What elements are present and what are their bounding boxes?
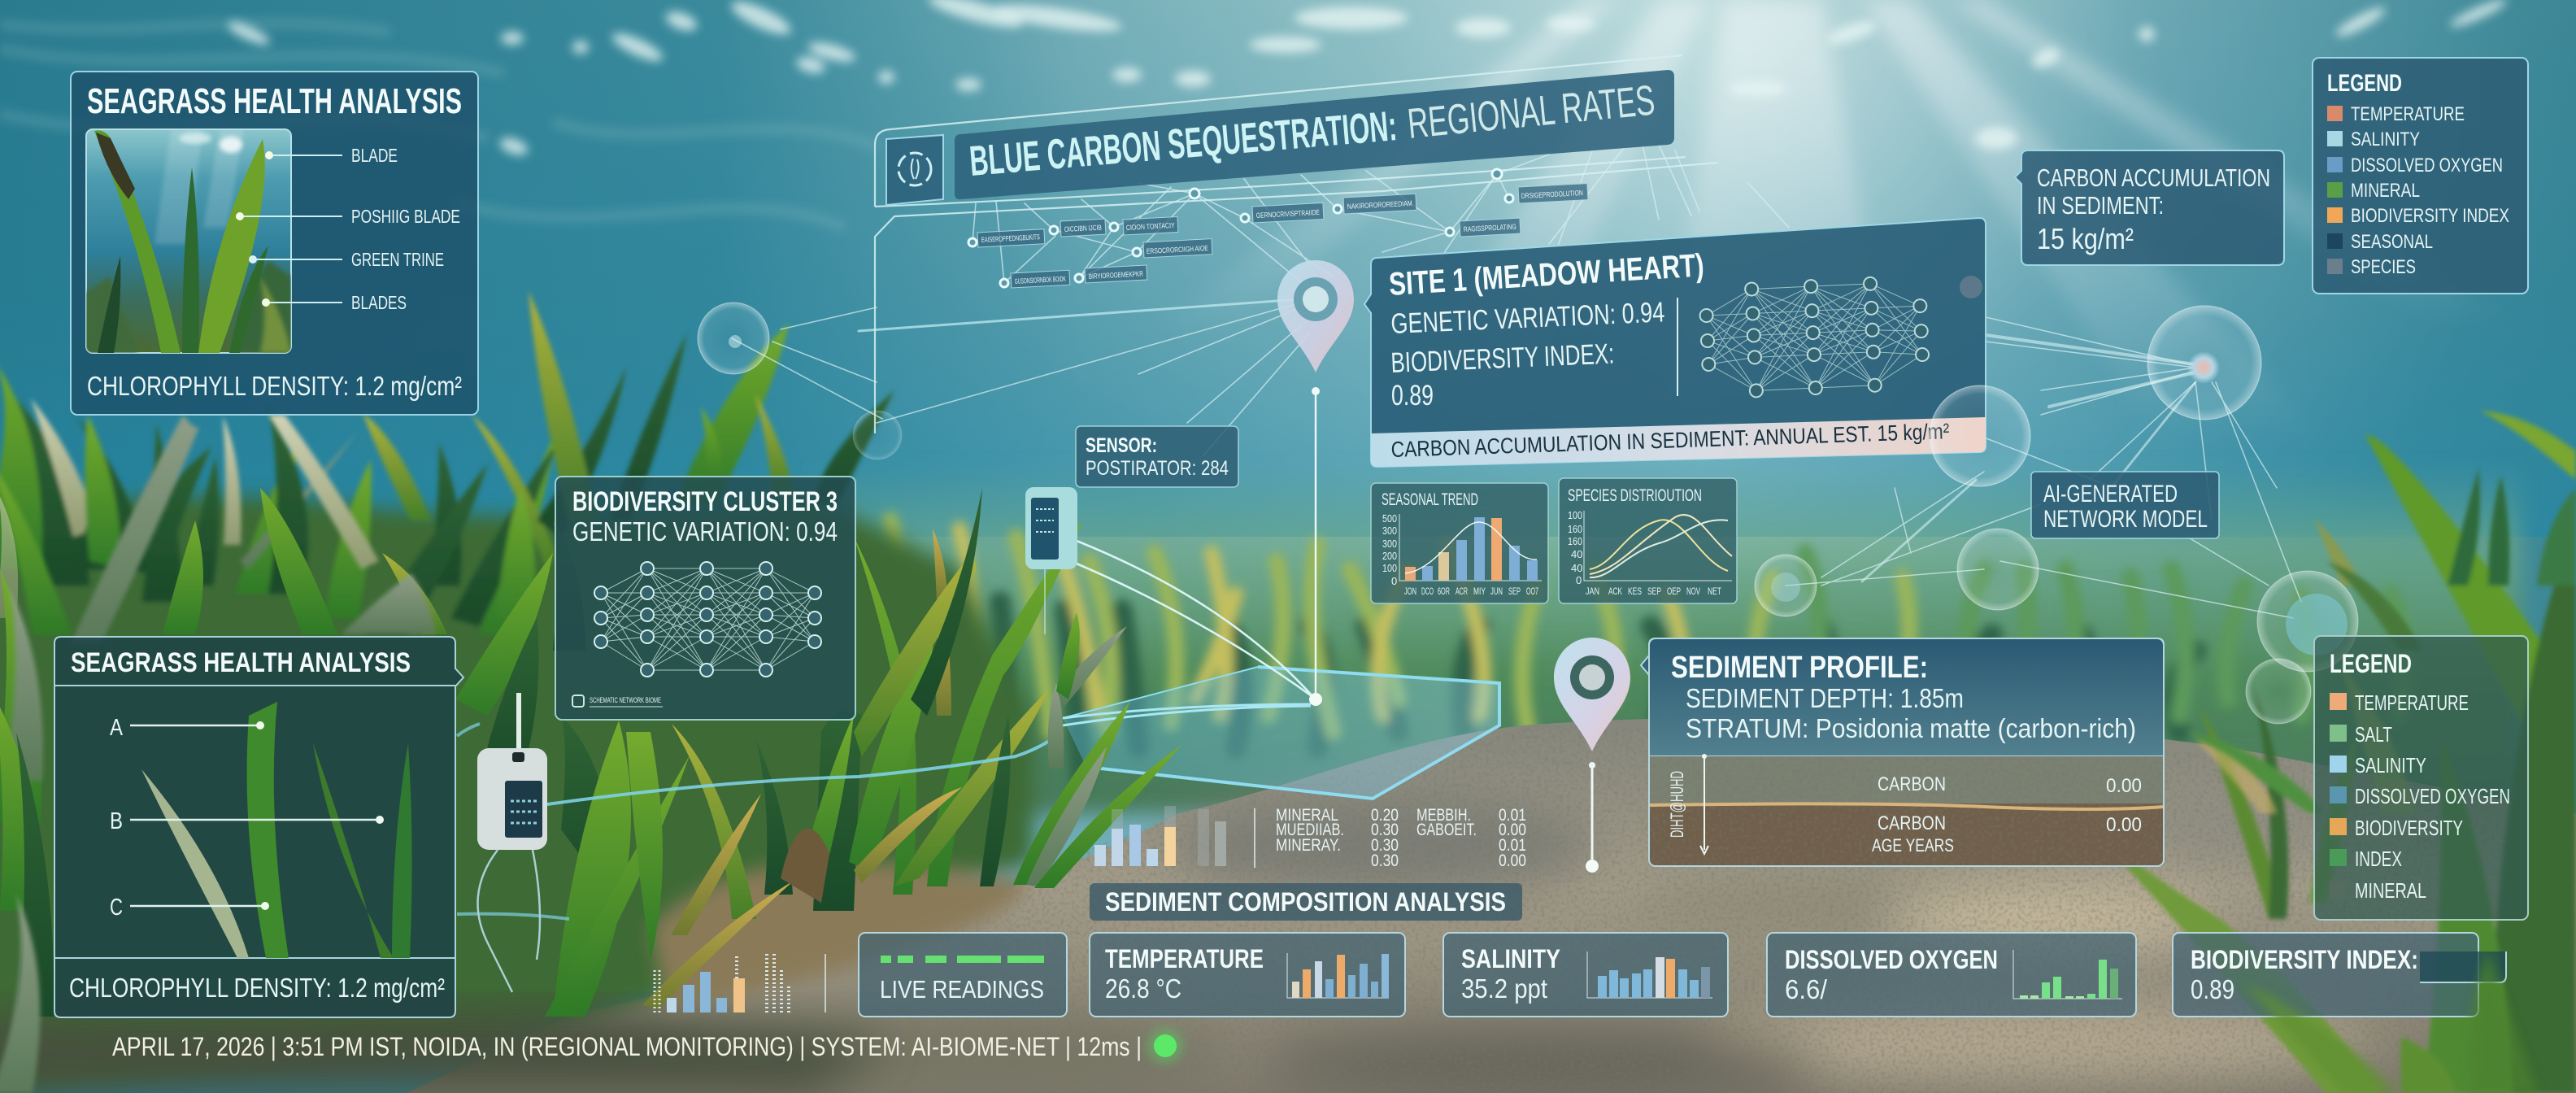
metric: genetic variation: GENETIC VARIATION: 0.94: [1390, 296, 1665, 340]
network of small data labels: ERSOCRORCIIGH AIOE: [1147, 244, 1208, 255]
line chart: species distribution: 160: [1568, 523, 1582, 535]
callout: sensor reading: SENSOR:: [1086, 434, 1157, 457]
table: sediment composition values: 0.30: [1371, 821, 1399, 839]
heading: sediment profile: SEDIMENT PROFILE:: [1671, 651, 1928, 685]
table: sediment composition values: 0.20: [1371, 806, 1399, 825]
callout: AI-generated network model: NETWORK MODEL: [2043, 506, 2208, 533]
legend: upper right: [2313, 58, 2528, 294]
legend: lower right: LEGEND: [2330, 649, 2412, 678]
callout: AI-generated network model: AI-GENERATED: [2043, 481, 2178, 507]
heading: biodiversity index: BIODIVERSITY INDEX:: [2191, 945, 2418, 974]
line chart: species distribution: JAN: [1586, 586, 1599, 597]
value: temperature: 26.8 °C: [1105, 973, 1181, 1004]
icon: location pin 2: [1554, 638, 1630, 873]
line chart: species distribution: OEP: [1667, 586, 1681, 597]
value: salinity: 35.2 ppt: [1461, 973, 1547, 1004]
icon: blue carbon emblem: [886, 135, 943, 205]
line chart: species distribution: 40: [1571, 562, 1582, 574]
panel: dissolved oxygen: [1767, 933, 2136, 1017]
text: stratum: STRATUM: Posidonia matte (carbon-rich): [1686, 713, 2136, 743]
heading: seagrass health analysis: SEAGRASS HEALTH ANALYSIS: [87, 81, 462, 121]
heading: sediment composition analysis: SEDIMENT COMPOSITION ANALYSIS: [1105, 887, 1506, 917]
table: sediment composition values: MEBBIH.: [1416, 806, 1471, 825]
legend items: BIODIVERSITY INDEX: [2351, 205, 2509, 227]
line chart: species distribution: 0: [1576, 574, 1582, 586]
legend: upper right: LEGEND: [2327, 70, 2402, 97]
connection lines: AI network and light beams: [732, 145, 2301, 618]
bar chart: seasonal trend: 300: [1382, 538, 1397, 550]
bar chart: seasonal trend: MIY: [1473, 586, 1486, 597]
line chart: species distribution: NOV: [1686, 586, 1700, 597]
values: carbon layers: 0.00: [2106, 775, 2142, 797]
panel: seagrass health analysis (lower left): [54, 637, 463, 1017]
line chart: species distribution: SEP: [1647, 586, 1661, 597]
title: regional rates: REGIONAL RATES: [1406, 76, 1657, 148]
table: sediment composition values: 0.01: [1499, 806, 1526, 825]
specimen blades: [141, 702, 412, 958]
table: sediment composition values: MINERAY.: [1276, 836, 1341, 855]
table: sediment composition values: MINERAL: [1276, 806, 1338, 825]
line chart: species distribution: 100: [1568, 509, 1582, 521]
heading: species distribution: SPECIES DISTRIOUTION: [1568, 486, 1702, 505]
diagram: neural network: [1699, 275, 1930, 399]
chart: sediment composition bars and table: [1094, 806, 1526, 870]
values: carbon layers: 0.00: [2106, 814, 2142, 836]
line chart: species distribution: 160: [1568, 535, 1582, 547]
callouts: A B C: [110, 715, 384, 921]
bar chart: seasonal trend: DCO: [1421, 586, 1434, 597]
metric: genetic variation: GENETIC VARIATION: 0.94: [572, 516, 838, 546]
text: sediment depth: SEDIMENT DEPTH: 1.85m: [1686, 683, 1964, 713]
heading: dissolved oxygen: DISSOLVED OXYGEN: [1785, 945, 1998, 974]
legend items: MINERAL: [2355, 878, 2426, 903]
heading: sediment composition analysis: [1090, 883, 1522, 921]
panel: sediment profile: [1641, 638, 2164, 866]
table: sediment composition values: 0.01: [1499, 836, 1526, 855]
callout: carbon accumulation: 15 kg/m²: [2037, 222, 2134, 255]
network of small data labels: BIRYIOROOEMEKPKR: [1089, 269, 1143, 281]
callouts: blade labels: GREEN TRINE: [351, 249, 444, 270]
network of small data labels: OICCIBN IJCIB: [1064, 224, 1102, 233]
network of small data labels: DRSIGEPRODOLUTION: [1521, 189, 1583, 200]
values: carbon layers: [1872, 773, 2142, 856]
callouts: A B C: A: [110, 715, 124, 741]
bar chart: seasonal trend: [1382, 512, 1542, 597]
heading: biodiversity cluster 3: BIODIVERSITY CLUSTER 3: [572, 486, 838, 517]
legend items: INDEX: [2355, 847, 2402, 871]
table: sediment composition values: 0.00: [1499, 821, 1526, 839]
diagram: neural network: [594, 562, 821, 677]
icon: status light: [1147, 1028, 1183, 1064]
legend items: SEASONAL: [2351, 231, 2433, 253]
panel: site 1 meadow heart: [1364, 218, 1986, 467]
legend items: SPECIES: [2351, 256, 2416, 278]
metric: biodiversity index: BIODIVERSITY INDEX:: [1390, 338, 1615, 379]
network of small data labels: NAKIROROROREEDIAM: [1347, 199, 1412, 211]
callout: carbon accumulation: CARBON ACCUMULATION: [2037, 163, 2270, 192]
icon: white sensor device: [477, 693, 547, 992]
legend items: TEMPERATURE: [2355, 690, 2469, 715]
panel: biodiversity index: [2173, 933, 2506, 1017]
callouts: blade labels: BLADES: [351, 292, 407, 313]
callouts: blade labels: POSHIIG BLADE: [351, 206, 460, 227]
footnote: model caption: [572, 695, 663, 707]
panel: species distribution chart: [1559, 478, 1737, 603]
network of small data labels: GUSONSIORNBOK BOIDK: [1015, 275, 1066, 285]
callout: sensor reading: [1076, 426, 1238, 487]
strip: annual carbon estimate: CARBON ACCUMULATION IN SEDIMENT: ANNUAL EST. 15 kg/m²: [1390, 419, 1950, 462]
line chart: species distribution: [1568, 509, 1732, 597]
panel: temperature: [1090, 933, 1405, 1017]
legend items: DISSOLVED OXYGEN: [2351, 155, 2503, 176]
label: live readings: LIVE READINGS: [880, 975, 1044, 1004]
line chart: species distribution: NET: [1708, 586, 1721, 597]
value: biodiversity index: 0.89: [2191, 974, 2234, 1004]
icon: location pin 1: [1277, 260, 1354, 706]
bar chart: seasonal trend: OO7: [1526, 586, 1538, 597]
line chart: species distribution: ACK: [1608, 586, 1622, 597]
panel: salinity: [1443, 933, 1728, 1017]
panel: seasonal trend chart: [1371, 483, 1548, 603]
value: dissolved oxygen: 6.6/: [1785, 974, 1828, 1004]
callout: sensor reading: POSTIRATOR: 284: [1086, 457, 1229, 480]
legend items: TEMPERATURE: [2351, 103, 2465, 125]
bar chart: seasonal trend: 500: [1382, 512, 1397, 525]
table: sediment composition values: GABOEIT.: [1416, 821, 1477, 839]
panel: biodiversity cluster 3: [555, 477, 855, 720]
holographic frame lines: [875, 55, 1717, 433]
table: sediment composition values: 0.30: [1371, 836, 1399, 855]
line chart: species distribution: 40: [1571, 548, 1582, 560]
network of small data labels: RAGISSPROLATING: [1464, 223, 1516, 233]
legend items: [2327, 103, 2509, 278]
bubbles: AI network nodes: [698, 303, 2358, 724]
bar chart: seasonal trend: SEP: [1508, 586, 1521, 597]
bar chart: temperature: [1287, 953, 1389, 998]
values: carbon layers: CARBON: [1878, 812, 1946, 834]
title: blue carbon sequestration: BLUE CARBON SEQUESTRATION:: [968, 102, 1399, 185]
network of small data labels: GERNOCRIVISPTRAIIDE: [1256, 208, 1320, 220]
legend items: [2330, 690, 2510, 903]
legend items: SALINITY: [2351, 128, 2420, 150]
bar chart: salinity: [1587, 951, 1712, 998]
bar chart: seasonal trend: ACR: [1456, 586, 1468, 597]
table: sediment composition values: 0.30: [1371, 851, 1399, 870]
heading: site 1: SITE 1 (MEADOW HEART): [1388, 247, 1705, 303]
panel: title banner: [886, 70, 1674, 205]
network of small data labels: [968, 169, 1588, 288]
network of small data labels: CIOON TONTACIY: [1126, 221, 1175, 232]
table: sediment composition values: 0.00: [1499, 851, 1526, 870]
icon: teal sensor device: [1025, 487, 1077, 634]
heading: salinity: SALINITY: [1461, 944, 1560, 973]
line chart: species distribution: KES: [1628, 586, 1642, 597]
bar chart: seasonal trend: 0: [1391, 575, 1397, 587]
footnote: model caption: SCHEMATIC NETWORK BIOME: [590, 696, 661, 704]
callout: carbon accumulation: IN SEDIMENT:: [2037, 191, 2164, 220]
callouts: blade labels: [236, 145, 460, 313]
sediment cross-section: [1649, 638, 2164, 866]
legend items: BIODIVERSITY: [2355, 816, 2463, 840]
legend items: MINERAL: [2351, 180, 2420, 202]
values: carbon layers: AGE YEARS: [1872, 835, 1954, 856]
legend items: SALT: [2355, 722, 2392, 747]
axis: depth arrow: DIHT@HUHD: [1667, 771, 1687, 838]
bar chart: seasonal trend: 300: [1382, 525, 1397, 537]
bar chart: seasonal trend: JON: [1404, 586, 1416, 597]
signal segments: [881, 956, 1044, 963]
metric: biodiversity index: 0.89: [1391, 380, 1434, 412]
bar chart: seasonal trend: 200: [1382, 550, 1397, 562]
network of small data labels: EAISEROPPEDNGBUKITS: [981, 233, 1040, 244]
heading: seagrass health analysis: SEAGRASS HEALTH ANALYSIS: [71, 647, 411, 678]
photo: seagrass blades close-up: [86, 129, 291, 353]
legend items: SALINITY: [2355, 753, 2426, 777]
legend: lower right: [2314, 636, 2528, 920]
axis: depth arrow: [1667, 754, 1708, 854]
legend items: DISSOLVED OXYGEN: [2355, 784, 2510, 808]
values: carbon layers: CARBON: [1878, 773, 1946, 795]
table: sediment composition values: MUEDIIAB.: [1276, 821, 1344, 839]
heading: temperature: TEMPERATURE: [1105, 944, 1264, 973]
panel: live readings: [859, 933, 1067, 1017]
callouts: A B C: B: [110, 808, 123, 834]
callout: AI-generated network model: [2031, 472, 2219, 538]
metric: chlorophyll density: CHLOROPHYLL DENSITY: 1.2 mg/cm²: [69, 973, 445, 1003]
callouts: A B C: C: [110, 895, 123, 921]
metric: biodiversity index: [1390, 338, 1615, 412]
bar chart: seasonal trend: 100: [1382, 562, 1397, 574]
callouts: blade labels: BLADE: [351, 145, 398, 166]
table: sediment composition values: [1276, 806, 1526, 870]
foreground blades over lower right panels: [2244, 951, 2537, 1093]
callout: carbon accumulation: [2015, 150, 2284, 265]
panel: seagrass health analysis (top left): [71, 72, 478, 415]
glass data plate under pin: [457, 541, 1499, 919]
bar chart: seasonal trend: 6OR: [1438, 586, 1450, 597]
heading: seasonal trend: SEASONAL TREND: [1382, 490, 1478, 509]
bar chart: dissolved oxygen: [2013, 950, 2122, 999]
status bar: date, location and system: APRIL 17, 2026 | 3:51 PM IST, NOIDA, IN (REGIONAL MONITORING) | SYSTEM: AI-BIOME-NET | 12ms |: [112, 1032, 1142, 1061]
metric: chlorophyll density: CHLOROPHYLL DENSITY: 1.2 mg/cm²: [87, 371, 462, 401]
bar chart: sediment mineral bars: [1094, 806, 1226, 866]
bar chart: seasonal trend: JUN: [1490, 586, 1503, 597]
bar chart: live readings preview: [655, 954, 825, 1012]
foreground blades over the plate: [1013, 612, 1182, 888]
